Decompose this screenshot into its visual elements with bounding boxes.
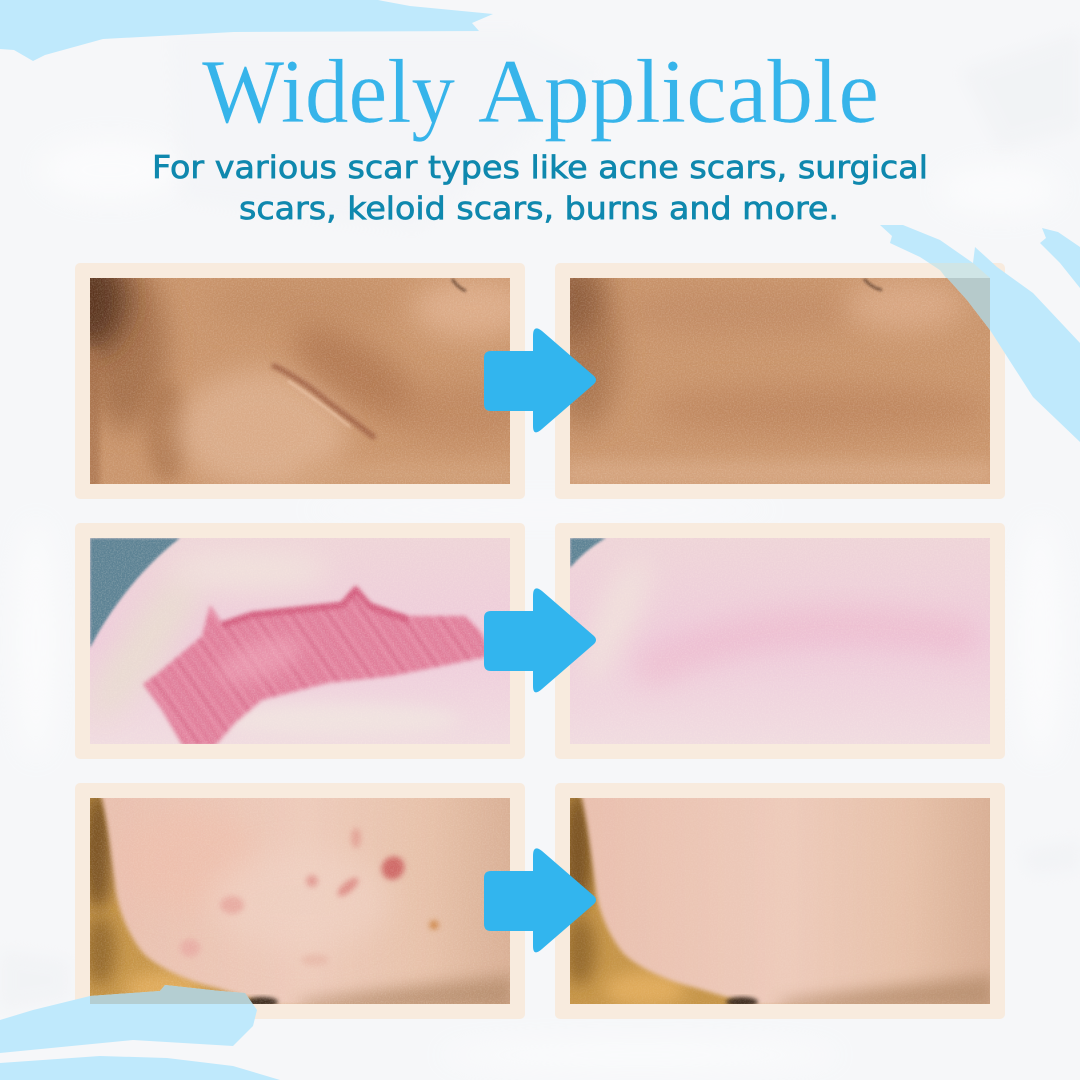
background corner — [90, 538, 180, 648]
navel — [864, 279, 882, 290]
overlap on frame — [930, 263, 990, 278]
photo: chin with acne marks — [82, 790, 515, 1010]
scar — [272, 365, 375, 438]
panel: acne scar after — [555, 783, 1005, 1019]
brush stroke: right side — [880, 225, 1080, 442]
arrow: row 1 — [484, 328, 596, 432]
photo: shoulder with keloid — [74, 538, 510, 746]
panel: keloid scar after — [555, 523, 1005, 759]
panel: acne scar before — [75, 783, 525, 1019]
panel: keloid scar before — [74, 523, 525, 759]
subtitle — [152, 150, 928, 227]
photo: shoulder healed — [567, 538, 990, 744]
overlap on photo — [90, 985, 253, 1004]
photo: chin healed — [562, 790, 995, 1010]
arrow: row 2 — [484, 588, 596, 692]
panel: surgical scar after — [546, 260, 1005, 499]
arrow: row 3 — [484, 848, 596, 952]
subtitle: For various scar types like acne scars, surgical — [152, 150, 928, 186]
subtitle: scars, keloid scars, burns and more. — [239, 191, 839, 227]
brush stroke: top left — [0, 0, 493, 61]
navel — [452, 279, 466, 291]
acne marks — [180, 828, 438, 966]
frame — [75, 263, 525, 499]
brush stroke: bottom left — [0, 985, 280, 1080]
panel: surgical scar before — [75, 263, 525, 499]
frame — [75, 523, 525, 759]
photo: abdomen healed — [570, 278, 990, 484]
frame — [75, 783, 525, 1019]
frame — [555, 523, 1005, 759]
overlap on photo — [947, 278, 990, 330]
frame — [555, 783, 1005, 1019]
background corner — [570, 538, 606, 568]
photo: abdomen with scar — [90, 278, 510, 484]
title: Applicable — [478, 41, 879, 142]
title: Widely — [202, 41, 455, 142]
keloid scar — [143, 586, 490, 746]
frame — [555, 263, 1005, 499]
